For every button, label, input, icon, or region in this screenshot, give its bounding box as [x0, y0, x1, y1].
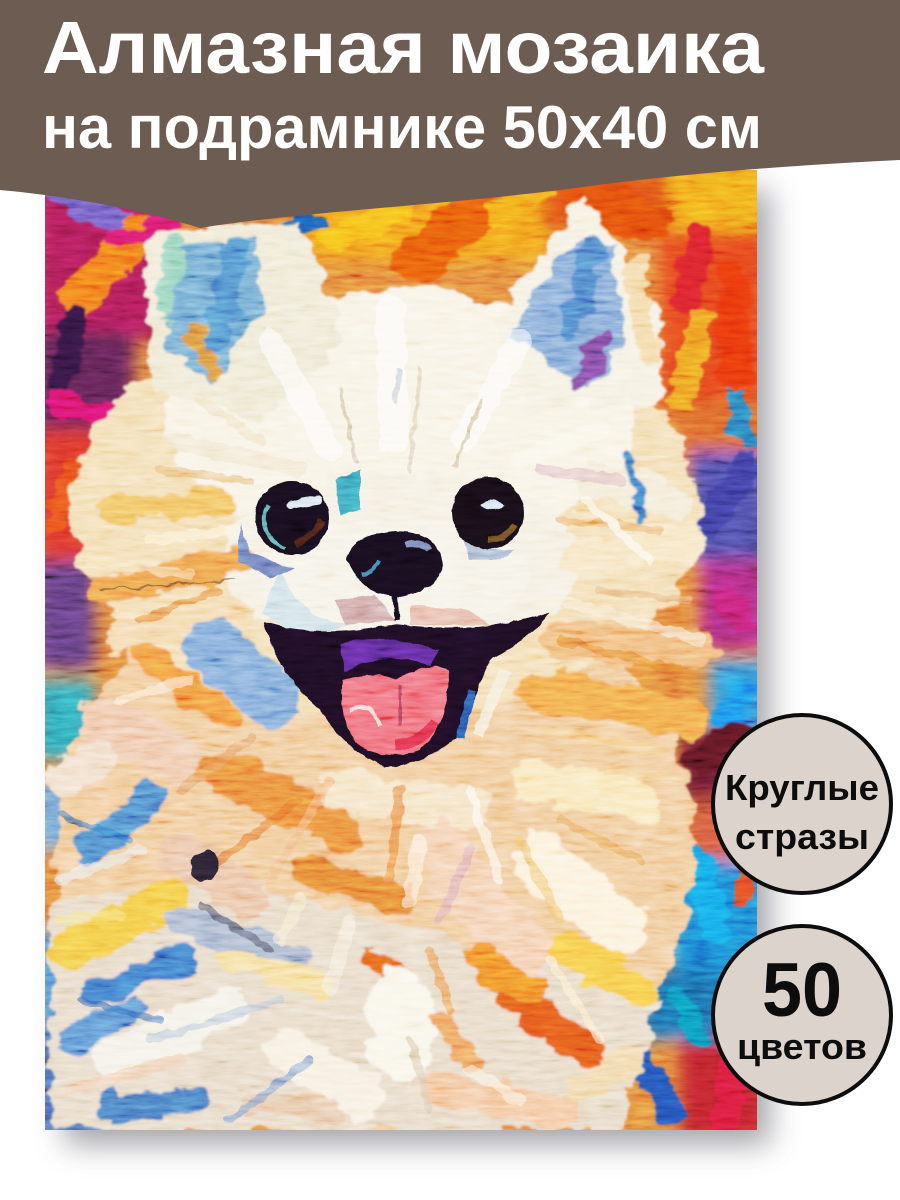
head top white — [165, 290, 635, 550]
banner — [0, 0, 900, 228]
title — [42, 6, 765, 161]
painted background colours — [35, 160, 770, 1140]
title: Алмазная мозаика — [42, 6, 765, 89]
eye: right — [452, 477, 524, 549]
muzzle — [318, 532, 498, 628]
badge: 50 colours: 50 — [762, 948, 842, 1033]
dog fur — [50, 195, 700, 1150]
cheek and body colours — [100, 560, 240, 590]
paint texture overlay — [45, 170, 757, 1130]
right ear — [495, 195, 665, 410]
badge: 50 colours: цветов — [737, 1026, 867, 1067]
left ear — [145, 222, 345, 420]
badge: round rhinestones: стразы — [735, 816, 869, 857]
canvas shadow — [65, 190, 770, 1145]
background brush strokes — [55, 190, 745, 1120]
mouth — [264, 612, 550, 767]
painting: colourful dog portrait — [35, 160, 770, 1150]
face — [238, 470, 550, 767]
badge: round rhinestones — [713, 715, 891, 893]
body mass — [47, 645, 700, 1130]
tongue — [341, 667, 448, 755]
eye: left — [255, 481, 329, 555]
badge: round rhinestones: Круглые — [725, 767, 879, 808]
fur shadow spot — [190, 851, 220, 881]
title: на подрамнике 50х40 см — [42, 94, 762, 161]
nose — [347, 531, 443, 620]
badge: 50 colours — [713, 926, 891, 1104]
fine fur strokes — [60, 310, 700, 1120]
